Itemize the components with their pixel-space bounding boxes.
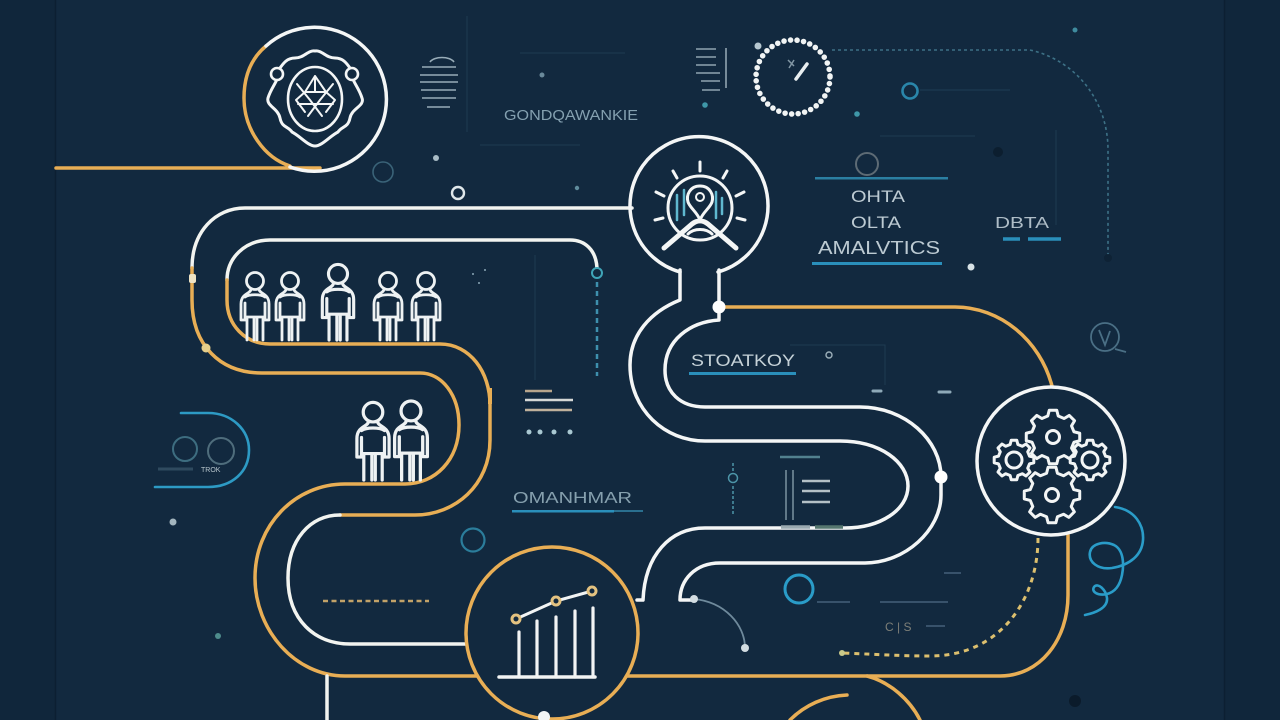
person: [374, 272, 402, 340]
icon: striped globe: [420, 58, 458, 107]
path: small white arc: [694, 599, 745, 648]
path: bottom arc right: [867, 676, 920, 720]
path: inner road white top: [227, 240, 597, 280]
inner arc: [688, 230, 712, 234]
dots cluster: [472, 270, 486, 283]
dot: [540, 72, 544, 78]
circle ring: [266, 27, 386, 171]
centre document icon: [780, 457, 843, 527]
right circle: [208, 438, 234, 464]
bars: [525, 390, 552, 392]
dot: [854, 111, 860, 117]
node: [488, 388, 492, 404]
path: inner road white lower loop: [288, 515, 465, 644]
faint panel lines: [467, 16, 1056, 385]
pin: [688, 186, 712, 220]
V badge: [1091, 323, 1126, 352]
small glyph row: C | S: [885, 620, 911, 634]
people group: five figures: [241, 264, 440, 340]
circle 3: bar chart: [466, 547, 638, 719]
circle ring: [630, 137, 768, 272]
trend points: [512, 587, 596, 623]
small label: TROK: [201, 467, 221, 474]
needle mark: [788, 60, 794, 68]
hub: [1046, 430, 1060, 444]
node: bottom of chart circle: [538, 711, 550, 720]
circle 1: brain icon: [266, 27, 386, 171]
gear top: [1026, 410, 1080, 464]
circle 4: gears icon: [977, 387, 1125, 535]
person: [322, 264, 354, 340]
small circle above analytics: [856, 153, 878, 175]
path: top left orange connector: [56, 46, 320, 168]
inner oval: [288, 67, 342, 131]
person: [412, 272, 440, 340]
gear left: [994, 440, 1034, 480]
underline top: [815, 177, 948, 180]
node: [189, 274, 196, 283]
label: ommarimar: OMANHMAR: [513, 490, 632, 507]
circle 2: bulb analytics icon: [630, 137, 768, 272]
dashes: [873, 391, 950, 392]
blue ring: [785, 575, 813, 603]
gear right: [1070, 440, 1110, 480]
orange dash row: [323, 600, 429, 602]
path: white vertical stub: [325, 676, 329, 720]
people group: two figures: [357, 401, 427, 480]
icon: dotted compass: [756, 40, 830, 114]
label: strategy: STOATKOY: [691, 351, 795, 370]
label: governance: GONDQAWANKIE: [504, 107, 638, 124]
path: blue dashed vertical: [596, 282, 598, 376]
label: data analytics block: [818, 187, 940, 258]
winding road paths: [56, 46, 1068, 720]
dot: [993, 147, 1003, 157]
left circle: [173, 437, 197, 461]
blue squiggle: [1085, 507, 1143, 615]
data underline: [1003, 237, 1061, 241]
globe: [668, 176, 732, 240]
line 2: OLTA: [851, 213, 902, 232]
rays: [655, 162, 745, 220]
line 1: OHTA: [851, 187, 906, 206]
node: [202, 344, 210, 352]
point: [512, 615, 520, 623]
dot: [575, 186, 579, 190]
ring: [452, 187, 464, 199]
ear left: [271, 68, 283, 80]
dot: [215, 633, 221, 639]
circle ring: [977, 387, 1125, 535]
point: [588, 587, 596, 595]
node: dotted start: [839, 650, 845, 656]
dot: [968, 264, 974, 270]
dot: [170, 518, 176, 526]
path: strategy road inner: [665, 270, 941, 600]
underline bottom: [812, 262, 942, 265]
lattice: [296, 76, 335, 116]
hub: [1046, 488, 1058, 502]
scattered dots: [170, 28, 1112, 707]
dot: [1072, 28, 1078, 32]
vertical glyph icon: [728, 463, 738, 515]
chart bars: [519, 608, 593, 677]
faint lines: [817, 573, 961, 626]
needle: [796, 64, 807, 79]
dots: [526, 430, 572, 434]
crossed handles: [664, 221, 736, 248]
dot: [826, 352, 832, 358]
pin hole: [696, 193, 704, 201]
globe detail: [677, 190, 722, 220]
label: data: DBTA: [995, 215, 1049, 232]
dot: [433, 155, 439, 161]
path: bottom arc left: [790, 695, 847, 720]
strategy underline: [689, 372, 796, 375]
dot: [702, 102, 708, 108]
ear right: [346, 68, 358, 80]
dotted ring: [756, 40, 830, 114]
path: strategy road outer: [630, 270, 908, 600]
circle ring: [466, 547, 638, 719]
dot: [754, 42, 762, 50]
hub: [1082, 452, 1098, 468]
person: [357, 402, 389, 480]
path: outer road orange meander: [192, 268, 1068, 676]
path: inner road orange meander: [227, 280, 490, 515]
dot: [1069, 695, 1081, 707]
line 3: AMALVTICS: [818, 237, 940, 258]
blue ring: [902, 84, 918, 98]
node: arc end: [741, 644, 749, 652]
left margin band: [0, 0, 55, 720]
trend line: [516, 591, 592, 619]
hub: [1006, 452, 1022, 468]
path: top right dashed: [832, 50, 1108, 258]
person: [276, 272, 304, 340]
path: dotted orange: [842, 538, 1038, 656]
chart baseline: [499, 675, 595, 679]
path: orange to gears: [719, 307, 1052, 386]
dot: [1104, 254, 1112, 262]
gear hubs: [1006, 430, 1098, 502]
node: blue ring: [592, 268, 602, 278]
node: arc start: [690, 595, 698, 603]
blue ring small: [462, 528, 484, 552]
ring: [373, 162, 393, 182]
brain outline: [268, 51, 362, 146]
road nodes: [189, 274, 948, 484]
path: outer road white top: [192, 208, 632, 268]
blue arc: [155, 413, 249, 487]
gear bottom: [1024, 467, 1080, 523]
point: [552, 597, 560, 605]
list beside road: [525, 391, 573, 434]
left blue panel: [155, 413, 249, 487]
icon: list lines: [696, 48, 726, 90]
node: [712, 300, 726, 314]
underline: [512, 510, 614, 512]
person: [395, 401, 427, 480]
right margin band: [1225, 0, 1280, 720]
node: [934, 470, 948, 484]
person: [241, 272, 269, 340]
